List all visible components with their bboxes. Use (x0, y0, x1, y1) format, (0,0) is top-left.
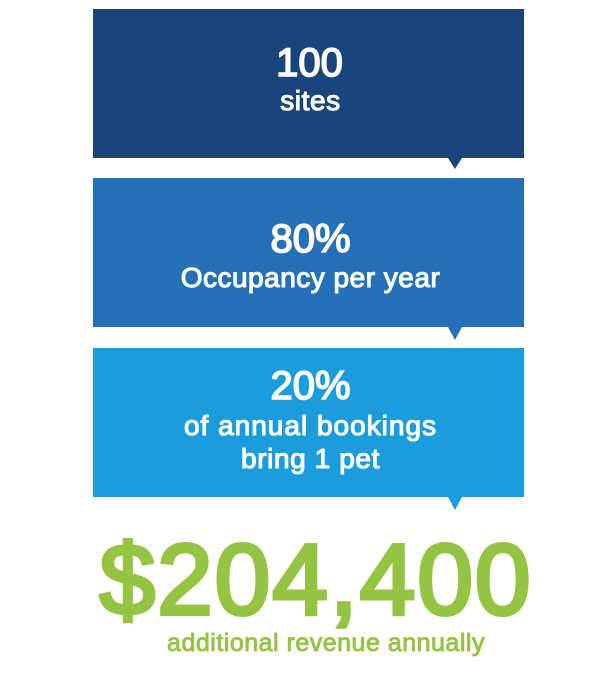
label: sites: sites (280, 85, 341, 116)
panel: 100 sites (93, 9, 524, 158)
arrow: pointer 1 (448, 158, 462, 169)
label: occupancy per year: Occupancy per year (181, 262, 440, 293)
panel: occupancy (93, 178, 524, 327)
number: 80%: 80% (270, 217, 351, 261)
number: 20%: 20% (270, 364, 351, 408)
revenue figure: $204,400 (99, 524, 533, 636)
arrow: pointer 3 (448, 497, 462, 510)
panel: pets (93, 348, 524, 497)
label: bring 1 pet: bring 1 pet (241, 443, 380, 474)
number: 100: 100 (276, 41, 343, 85)
revenue caption: additional revenue annually (167, 629, 485, 657)
label: of annual bookings: of annual bookings (184, 410, 437, 441)
arrow: pointer 2 (448, 327, 462, 340)
